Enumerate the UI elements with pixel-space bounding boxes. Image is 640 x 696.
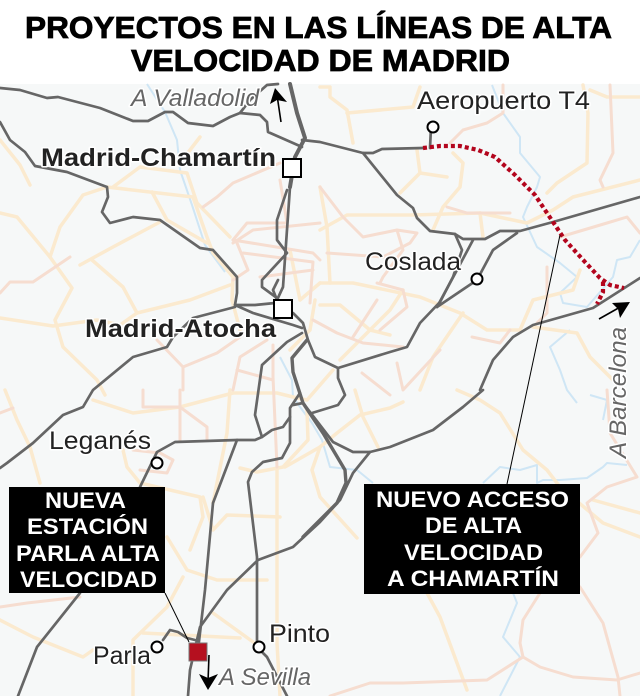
- title: [25, 10, 612, 78]
- callout: Nueva estación Parla Alta Velocidad: ESTACIÓN: [27, 514, 148, 539]
- label: Leganés: Leganés: [49, 427, 151, 455]
- callout: Nueva estación Parla Alta Velocidad: PARLA ALTA: [16, 541, 160, 566]
- main north-south trunk: [290, 84, 305, 187]
- label: Parla: Parla: [93, 642, 151, 670]
- leader lines: [165, 235, 560, 642]
- rail line: north-west: [0, 88, 302, 147]
- station: Parla Alta Velocidad: [189, 643, 207, 661]
- label: A Valladolid: A Valladolid: [129, 85, 260, 112]
- label: A Sevilla: A Sevilla: [217, 664, 311, 691]
- label: Pinto: Pinto: [269, 620, 330, 648]
- callout: Nuevo acceso de alta velocidad a Chamartín: VELOCIDAD: [404, 540, 543, 565]
- callout: Nueva estación Parla Alta Velocidad: NUEVA: [45, 488, 126, 513]
- label: Madrid-Atocha: Madrid-Atocha: [85, 315, 277, 343]
- title: PROYECTOS EN LAS LÍNEAS DE ALTA: [25, 10, 612, 45]
- station: Madrid-Atocha: [274, 300, 292, 318]
- callout: Nuevo acceso de alta velocidad a Chamartín: [364, 484, 580, 594]
- rivers: [147, 84, 640, 696]
- arrow: to Sevilla: [199, 655, 218, 690]
- callout: Nueva estación Parla Alta Velocidad: [9, 487, 165, 593]
- label: A Barcelona: A Barcelona: [605, 327, 632, 460]
- callout: Nuevo acceso de alta velocidad a Chamartín: NUEVO ACCESO: [376, 487, 569, 512]
- callout: Nuevo acceso de alta velocidad a Chamartín: A CHAMARTÍN: [387, 566, 559, 591]
- label: Madrid-Chamartín: Madrid-Chamartín: [41, 144, 276, 172]
- stop markers: [152, 122, 482, 652]
- label: Aeropuerto T4: Aeropuerto T4: [417, 87, 590, 115]
- callout: Nuevo acceso de alta velocidad a Chamartín: DE ALTA: [425, 513, 522, 538]
- callout: Nueva estación Parla Alta Velocidad: VELOCIDAD: [20, 567, 157, 592]
- arrow: to Barcelona: [599, 302, 630, 319]
- title: VELOCIDAD DE MADRID: [131, 43, 510, 78]
- arrow: to Valladolid: [270, 88, 287, 122]
- label: Coslada: Coslada: [365, 248, 461, 276]
- station: Madrid-Chamartín: [283, 159, 301, 177]
- new high-speed access route: [423, 146, 624, 304]
